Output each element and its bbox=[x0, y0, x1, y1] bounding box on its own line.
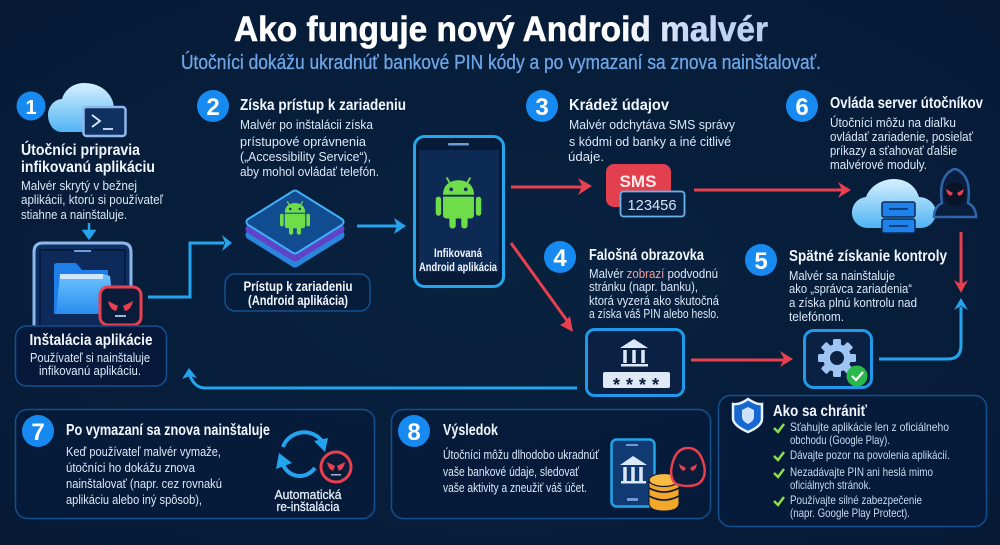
number badge 4 bbox=[544, 241, 576, 273]
step 4: fake screen: stránku (napr. banku), bbox=[589, 279, 698, 294]
subtitle: Útočníci dokážu ukradnúť bankové PIN kódy a po vymazaní sa znova nainštalovať. bbox=[181, 51, 821, 74]
number badge 4: 4 bbox=[553, 245, 567, 272]
number badge 1 bbox=[16, 92, 46, 120]
step 2: access: prístupové oprávnenia bbox=[240, 134, 367, 149]
text 7: Keď používateľ malvér vymaže, bbox=[66, 444, 221, 459]
number badge 3: 3 bbox=[535, 94, 549, 121]
icon: shield bbox=[733, 399, 762, 432]
panel: app installation bbox=[16, 326, 166, 386]
title: Ako funguje nový Android malvér bbox=[234, 10, 768, 49]
text 4: Malvér zobrazí podvodnú bbox=[589, 266, 718, 281]
phone with folder bbox=[34, 243, 141, 326]
text 6: Útočníci môžu na diaľku bbox=[830, 115, 956, 130]
heading 3: Krádež údajov bbox=[569, 97, 669, 114]
step 3: data theft bbox=[526, 90, 735, 164]
infected phone bbox=[414, 136, 504, 286]
step 5: control: ako „správca zariadenia“ bbox=[789, 281, 912, 296]
number badge 6 bbox=[786, 90, 818, 122]
panel: app installation: infikovanú aplikáciu. bbox=[39, 363, 141, 378]
step 5: control bbox=[745, 244, 947, 324]
panel 8: result: vaše aktivity a zneužiť váš účet. bbox=[443, 480, 587, 495]
text 8: Útočníci môžu dlhodobo ukradnúť bbox=[443, 447, 599, 462]
step 1: attackers prepare app bbox=[16, 83, 163, 238]
step 5: control: telefónom. bbox=[789, 309, 844, 324]
number badge 5: 5 bbox=[754, 248, 768, 275]
text 3: Malvér odchytáva SMS správy bbox=[569, 117, 735, 132]
step 4: fake screen: a získa váš PIN alebo heslo. bbox=[589, 306, 719, 321]
heading 7: Po vymazaní sa znova nainštaluje bbox=[66, 422, 270, 439]
checklist: obchodu (Google Play). bbox=[790, 433, 890, 447]
step 6: attacker server: malvérové moduly. bbox=[830, 157, 927, 172]
step 3: data theft: údaje. bbox=[568, 149, 604, 164]
icon: cloud with terminal bbox=[48, 83, 126, 136]
checklist: oficiálnych stránok. bbox=[790, 478, 871, 492]
step 1: attackers prepare app: infikovanú aplikáciu bbox=[21, 159, 155, 176]
arrow: phone to fake screen bbox=[511, 243, 573, 332]
icon: android bbox=[436, 178, 481, 228]
heading 2: Získa prístup k zariadeniu bbox=[240, 97, 406, 114]
panel: how to protect yourself bbox=[718, 396, 986, 526]
panel 7: reinstalls after removal: útočníci ho dokážu znova bbox=[66, 460, 196, 475]
step 2: access bbox=[197, 90, 406, 179]
number badge 5 bbox=[745, 244, 777, 276]
phone caption: Infikovaná bbox=[434, 246, 482, 260]
step 6: attacker server: ovládať zariadenie, posielať bbox=[830, 129, 973, 144]
number badge 8 bbox=[398, 415, 430, 447]
checklist bbox=[774, 420, 950, 520]
arrow: server to control bbox=[954, 232, 968, 293]
checklist: Nezadávajte PIN ani heslá mimo bbox=[790, 465, 933, 479]
checklist: Dávajte pozor na povolenia aplikácií. bbox=[790, 448, 950, 462]
icon: android chip bbox=[250, 194, 340, 263]
number badge 6: 6 bbox=[795, 94, 809, 121]
number badge 8: 8 bbox=[407, 419, 421, 446]
arrow: fake screen to settings bbox=[691, 351, 793, 367]
checklist: Sťahujte aplikácie len z oficiálneho bbox=[790, 420, 949, 434]
arrow: phone to SMS bbox=[511, 178, 592, 195]
text 1: Malvér skrytý v bežnej bbox=[21, 178, 137, 193]
number badge 1: 1 bbox=[25, 97, 37, 119]
panel 8: result bbox=[392, 410, 710, 518]
step 4: fake screen: ktorá vyzerá ako skutočná bbox=[589, 293, 720, 308]
number badge 2: 2 bbox=[206, 94, 220, 121]
icon: fake bank screen: **** bbox=[613, 375, 659, 395]
label: device access: Prístup k zariadeniu bbox=[244, 278, 352, 294]
label: device access: (Android aplikácia) bbox=[248, 292, 348, 308]
step 6: attacker server: príkazy a sťahovať ďalšie bbox=[830, 143, 957, 158]
icon: settings gear bbox=[804, 330, 872, 388]
icon: hooded attacker bbox=[671, 448, 705, 486]
icon: reinstall cycle bbox=[276, 432, 351, 482]
heading 8: Výsledok bbox=[443, 422, 498, 439]
step 1: attackers prepare app: stiahne a nainštaluje. bbox=[21, 207, 127, 222]
arrow down bbox=[84, 223, 94, 238]
panel 7: reinstalls after removal: nainštalovať (napr. cez rovnakú bbox=[66, 476, 222, 491]
step 6: attacker server bbox=[786, 90, 983, 172]
icon: phone with bank and coins bbox=[612, 440, 679, 511]
icon: SMS code: 123456 bbox=[628, 197, 676, 214]
label: device access bbox=[225, 274, 370, 311]
checklist: Používajte silné zabezpečenie bbox=[790, 493, 922, 507]
step 4: fake screen bbox=[544, 241, 720, 321]
panel 7: reinstalls after removal: aplikáciu alebo iný spôsob), bbox=[66, 492, 202, 507]
caption: automatic reinstall: Automatická bbox=[274, 487, 342, 502]
heading: protection: Ako sa chrániť bbox=[773, 403, 867, 420]
icon: fake bank screen bbox=[586, 330, 684, 396]
icon: SMS code: SMS bbox=[620, 172, 656, 191]
number badge 7: 7 bbox=[31, 419, 45, 446]
text 2: Malvér po inštalácii získa bbox=[240, 117, 374, 132]
heading 5: Spätné získanie kontroly bbox=[789, 248, 947, 265]
step 2: access: aby mohol ovládať telefón. bbox=[240, 164, 379, 179]
panel 7: reinstalls after removal: re-inštalácia bbox=[276, 499, 340, 514]
number badge 3 bbox=[526, 90, 558, 122]
arrow: chip to phone bbox=[357, 218, 406, 234]
panel: app installation: Používateľ si nainštaluje bbox=[30, 350, 150, 365]
text 5: Malvér sa nainštaluje bbox=[789, 268, 895, 283]
step 2: access: („Accessibility Service“), bbox=[240, 149, 371, 164]
step 3: data theft: s kódmi od banky a iné citlivé bbox=[569, 134, 731, 149]
panel 8: result: vaše bankové údaje, sledovať bbox=[443, 464, 579, 479]
arrow: settings to server bbox=[879, 298, 968, 359]
arrow: SMS to server bbox=[694, 182, 851, 198]
checklist: (napr. Google Play Protect). bbox=[790, 506, 910, 520]
step 5: control: a získa plnú kontrolu nad bbox=[789, 295, 917, 310]
heading 1: Útočníci pripravia bbox=[21, 140, 140, 159]
number badge 7 bbox=[22, 415, 54, 447]
arrow: installation to access bbox=[148, 235, 232, 297]
icon: cloud server bbox=[852, 179, 936, 233]
icon: SMS code bbox=[606, 164, 684, 216]
panel: app installation: Inštalácia aplikácie bbox=[30, 332, 153, 349]
arrow: fake screen back to install bbox=[182, 368, 577, 388]
number badge 2 bbox=[197, 90, 229, 122]
panel 7: reinstalls after removal bbox=[16, 410, 374, 518]
icon: hooded attacker bbox=[934, 169, 976, 217]
icon: red malware badge bbox=[100, 287, 141, 325]
infected phone: Android aplikácia bbox=[419, 260, 497, 274]
step 1: attackers prepare app: aplikácii, ktorú si používateľ bbox=[21, 192, 163, 207]
heading 4: Falošná obrazovka bbox=[589, 247, 704, 264]
